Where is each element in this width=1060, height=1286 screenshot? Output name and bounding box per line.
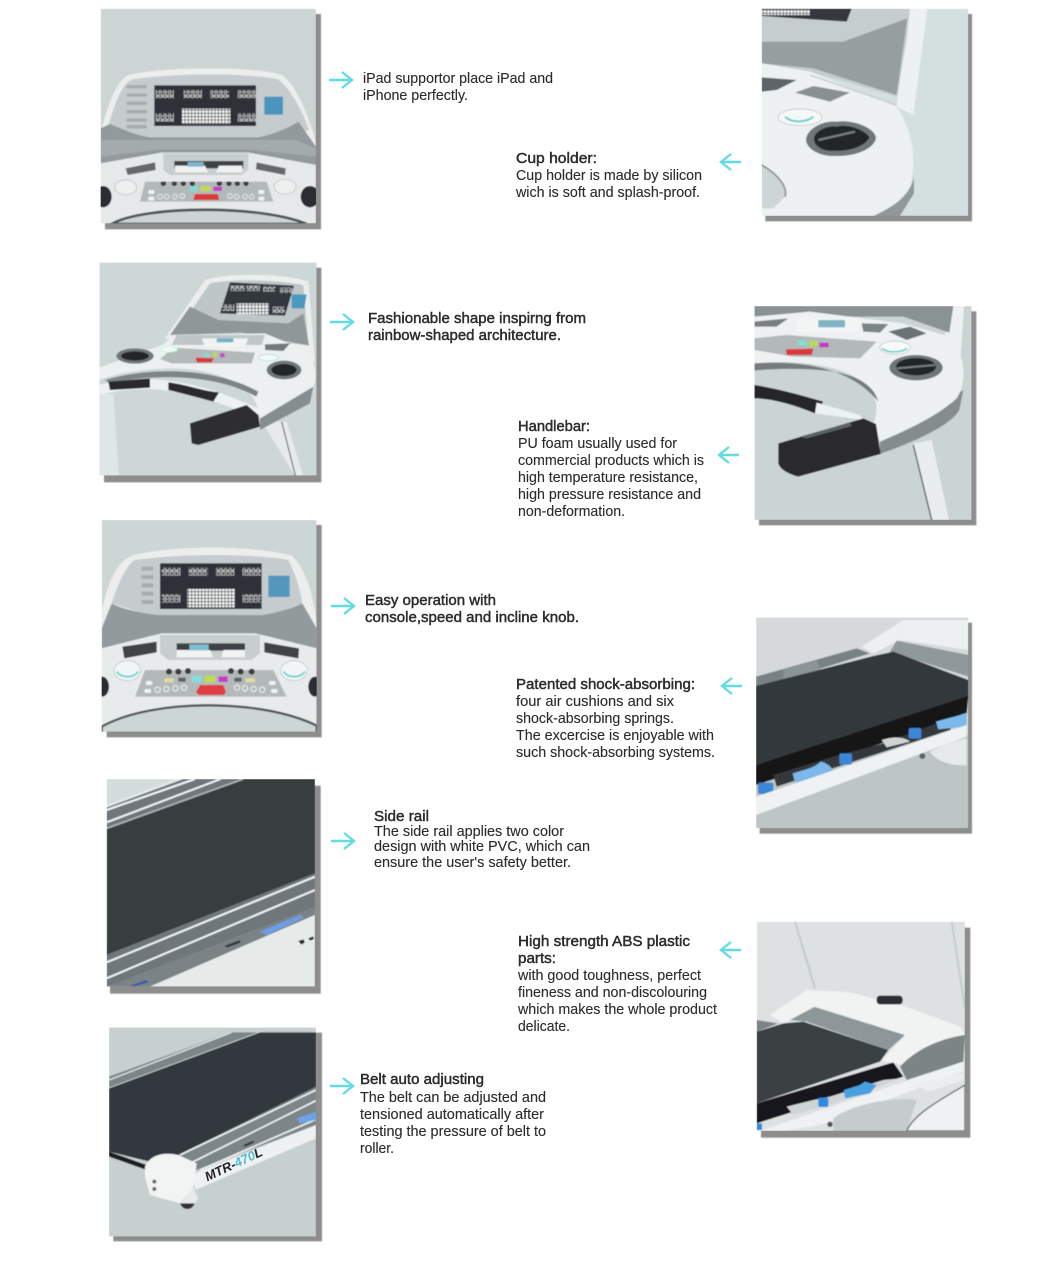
- panel: console and knobs: [96, 520, 322, 737]
- text: iPad supporter: iPad supportor place iPad and: [363, 71, 553, 87]
- arrow: side rail: [331, 833, 354, 849]
- foam grip: [754, 385, 823, 413]
- text: belt auto adjusting: tensioned automatically after: [360, 1107, 544, 1123]
- incline knob: [281, 661, 307, 681]
- arrow: iPad supporter: [329, 72, 352, 88]
- text: handlebar: Handlebar:: [518, 419, 590, 435]
- right leg: [262, 422, 303, 477]
- grip end: [778, 418, 881, 477]
- text: side rail: design with white PVC, which can: [374, 839, 590, 855]
- spring: [758, 728, 921, 794]
- wheel: [180, 1200, 195, 1210]
- text: handlebar: commercial products which is: [518, 453, 704, 469]
- base roller: [919, 738, 967, 765]
- text: easy operation: console,speed and incline knob.: [365, 610, 579, 626]
- text: handlebar: high pressure resistance and: [518, 487, 701, 503]
- text: ABS parts: fineness and non-discolouring: [518, 985, 707, 1001]
- text: side rail: Side rail: [374, 809, 429, 825]
- text: ABS parts: delicate.: [518, 1019, 570, 1035]
- text: shock-absorbing: four air cushions and six: [516, 694, 675, 710]
- arrow: easy operation: [331, 598, 354, 614]
- air cushion right: [936, 713, 967, 729]
- iPad supporter display: [264, 97, 283, 115]
- blue cushions: [757, 1082, 877, 1130]
- text: iPad supporter: iPhone perfectly.: [363, 88, 468, 104]
- text: fashionable shape: Fashionable shape inspirng from: [368, 311, 586, 327]
- arrow: handlebar: [719, 447, 739, 463]
- text: easy operation: Easy operation with: [365, 593, 496, 609]
- arrow: shock-absorbing: [722, 678, 742, 694]
- text: handlebar: high temperature resistance,: [518, 470, 698, 486]
- leg: [913, 440, 949, 520]
- left leg: [99, 393, 119, 476]
- iPad display: [268, 576, 290, 597]
- text: fashionable shape: [368, 311, 586, 344]
- text: cup holder: [515, 151, 702, 201]
- arrow: cup holder: [721, 154, 741, 170]
- blue cushion accent: [260, 915, 304, 935]
- text: belt auto adjusting: roller.: [360, 1141, 394, 1157]
- panel: handlebar close-up: [754, 306, 976, 525]
- end cap: [145, 1154, 198, 1203]
- text: side rail: ensure the user's safety better.: [374, 855, 571, 871]
- text: shock-absorbing: [516, 677, 715, 761]
- text: cup holder: wich is soft and splash-proof.: [515, 185, 700, 201]
- text: side rail: [374, 809, 590, 871]
- text: belt auto adjusting: testing the pressure of belt to: [360, 1124, 546, 1140]
- text: easy operation: [365, 593, 579, 626]
- logo badge: [877, 996, 903, 1004]
- dial: [880, 341, 910, 354]
- panel: side rail: [107, 779, 321, 994]
- text: belt auto adjusting: Belt auto adjusting: [360, 1072, 484, 1088]
- text: ABS parts: which makes the whole product: [517, 1002, 717, 1018]
- panel: cup holder: [762, 9, 972, 221]
- arrow: ABS parts: [721, 942, 741, 958]
- arrow: fashionable shape: [330, 314, 353, 330]
- text: shock-absorbing: The excercise is enjoyable with: [516, 728, 714, 744]
- screen: [154, 85, 256, 126]
- text: side rail: The side rail applies two color: [374, 824, 564, 840]
- panel: shock absorbing deck: [756, 617, 972, 834]
- text: belt auto adjusting: [360, 1072, 546, 1157]
- model label: MTR-470L: [202, 1144, 265, 1184]
- handlebar frame: [99, 333, 315, 418]
- panel: console with iPad supporter: [94, 9, 321, 229]
- text: handlebar: PU foam usually used for: [518, 436, 677, 452]
- panel: ABS hood: [757, 922, 970, 1138]
- arrow: belt auto adjusting: [330, 1078, 353, 1094]
- text: cup holder: Cup holder is made by silicon: [516, 168, 702, 184]
- panel: handlebar arch: [99, 262, 321, 482]
- screen: [160, 563, 262, 609]
- speed knob: [114, 661, 141, 681]
- speed dial: [778, 109, 822, 126]
- text: shock-absorbing: such shock-absorbing systems.: [516, 745, 715, 761]
- keypad: [135, 668, 287, 697]
- cup holder: [806, 121, 876, 156]
- text: handlebar: non-deformation.: [518, 504, 625, 520]
- text: shock-absorbing: Patented shock-absorbing:: [516, 677, 695, 693]
- text: ABS parts: High strength ABS plastic: [518, 934, 690, 950]
- text: fashionable shape: rainbow-shaped architecture.: [368, 328, 561, 344]
- text: ABS parts: with good toughness, perfect: [517, 968, 701, 984]
- air cushion: [793, 762, 833, 783]
- text: handlebar: [518, 419, 704, 520]
- text: belt auto adjusting: The belt can be adjusted and: [360, 1090, 546, 1106]
- text: iPad supporter: [363, 71, 553, 104]
- grip: [190, 405, 260, 445]
- text: cup holder: Cup holder:: [516, 151, 597, 167]
- cup holder: [889, 355, 943, 380]
- text: ABS parts: [517, 934, 717, 1035]
- text: shock-absorbing: shock-absorbing springs.: [516, 711, 674, 727]
- panel: belt auto adjusting: [109, 1027, 322, 1241]
- text: ABS parts: parts:: [518, 951, 556, 967]
